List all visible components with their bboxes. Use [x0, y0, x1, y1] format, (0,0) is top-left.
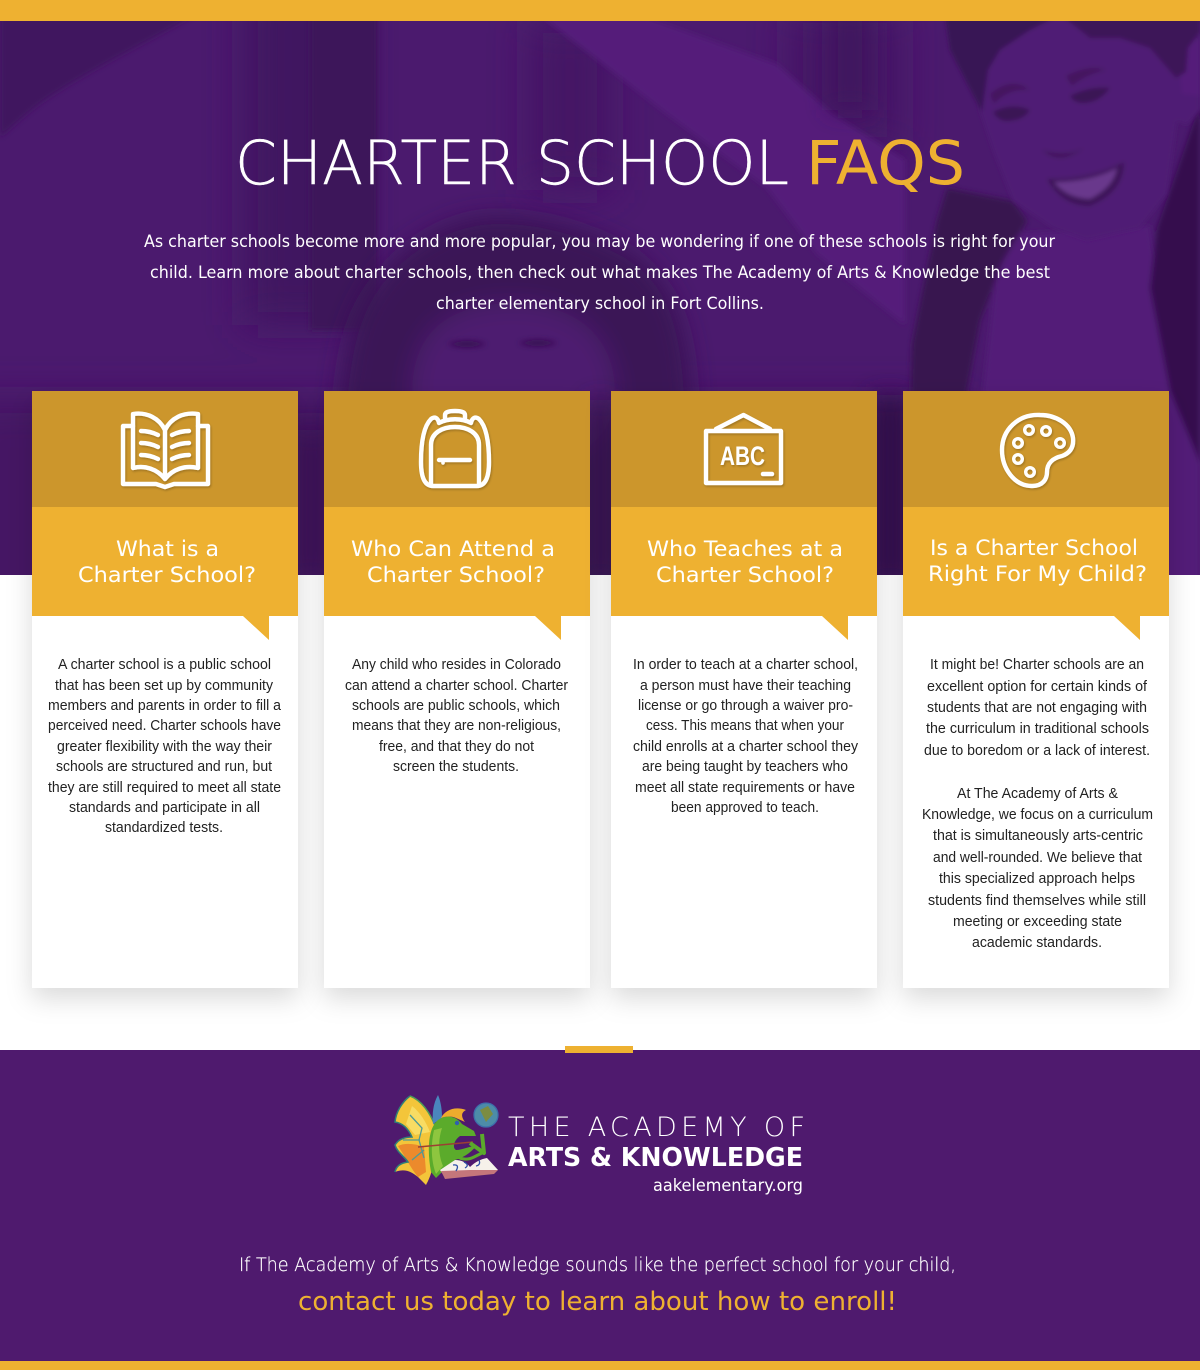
text block: right for my child: Knowledge, we focus on a curriculum: [922, 807, 1153, 823]
text block: who teaches: a person must have their teaching: [640, 678, 851, 694]
heading: what is a charter school: Charter School?: [78, 563, 256, 587]
text block: right for my child: [922, 657, 1153, 951]
closing line: If The Academy of Arts & Knowledge sounds like the perfect school for your child,: [239, 1255, 956, 1276]
text block: who teaches: been approved to teach.: [671, 800, 819, 816]
text block: who teaches: child enrolls at a charter school they: [633, 739, 859, 755]
heading: who teaches: Charter School?: [656, 563, 834, 587]
panel: who teaches: [611, 391, 877, 988]
text block: right for my child: that is simultaneously arts-centric: [933, 828, 1143, 844]
text block: right for my child: and well-rounded. We believe that: [933, 850, 1142, 866]
panel: who can attend: [324, 391, 590, 988]
text block: who teaches: [633, 657, 859, 816]
heading: who teaches: [647, 537, 843, 587]
heading: who can attend: [351, 537, 555, 587]
text block: who can attend: can attend a charter school. Charter: [345, 678, 568, 694]
heading: right for my child: Right For My Child?: [928, 562, 1147, 586]
intro paragraph: [144, 232, 1055, 313]
text block: who can attend: schools are public schools, which: [352, 698, 560, 714]
text block: right for my child: meeting or exceeding state: [953, 914, 1122, 930]
text block: who can attend: means that they are non-religious,: [352, 718, 561, 734]
text block: right for my child: the curriculum in traditional schools: [926, 721, 1149, 737]
icon: open book: [123, 414, 208, 487]
panel: right for my child: [903, 391, 1169, 988]
icon: dragon logo: [395, 1095, 498, 1185]
logo wordmark: [508, 1112, 805, 1195]
intro paragraph: As charter schools become more and more popular, you may be wondering if one of these schools is right for your: [144, 232, 1055, 251]
logo wordmark: ARTS & KNOWLEDGE: [508, 1143, 803, 1173]
text block: who teaches: license or go through a waiver pro-: [638, 698, 853, 714]
text block: what is a charter school: standardized tests.: [105, 820, 223, 836]
footer accent tab: [565, 1046, 633, 1053]
heading: what is a charter school: What is a: [116, 537, 219, 561]
text block: what is a charter school: [48, 657, 281, 836]
text block: right for my child: academic standards.: [972, 935, 1102, 951]
raised arm: [540, 15, 905, 325]
hero photo background: [0, 21, 1200, 575]
icon: paint palette: [1002, 415, 1073, 486]
bottom gold bar: [0, 1361, 1200, 1370]
logo wordmark: aakelementary.org: [653, 1176, 803, 1195]
text block: who can attend: screen the students.: [393, 759, 519, 775]
icon: backpack: [421, 411, 489, 486]
logo wordmark: THE ACADEMY OF: [508, 1112, 805, 1143]
heading: who teaches: Who Teaches at a: [647, 537, 843, 561]
heading: who can attend: Who Can Attend a: [351, 537, 555, 561]
text block: right for my child: students that are not engaging with: [927, 700, 1147, 716]
text block: who can attend: free, and that they do not: [379, 739, 534, 755]
text block: who teaches: cess. This means that when your: [646, 718, 844, 734]
text block: what is a charter school: standards and participate in all: [69, 800, 260, 816]
soft bands: [0, 21, 880, 575]
top gold bar: [0, 0, 1200, 21]
text block: what is a charter school: they are still required to meet all state: [48, 780, 281, 796]
text block: who teaches: In order to teach at a charter school,: [633, 657, 858, 673]
text block: who teaches: are being taught by teachers who: [642, 759, 848, 775]
icon: abc chalkboard: ABC: [720, 441, 765, 471]
text block: who can attend: [345, 657, 568, 775]
text block: right for my child: excellent option for certain kinds of: [927, 679, 1148, 695]
girl in background: [335, 216, 692, 600]
footer panel: [0, 1050, 1200, 1361]
icon: abc chalkboard: [706, 415, 781, 483]
text block: what is a charter school: members and parents in order to fill a: [48, 698, 281, 714]
text block: what is a charter school: perceived need. Charter schools have: [48, 718, 281, 734]
text block: what is a charter school: that has been set up by community: [55, 678, 274, 694]
text block: right for my child: students find themselves while still: [928, 893, 1146, 909]
text block: who teaches: meet all state requirements or have: [635, 780, 855, 796]
text block: right for my child: It might be! Charter schools are an: [930, 657, 1144, 673]
heading: who can attend: Charter School?: [367, 563, 545, 587]
text block: who can attend: Any child who resides in Colorado: [352, 657, 561, 673]
girl eyes: [447, 340, 558, 347]
intro paragraph: child. Learn more about charter schools, then check out what makes The Academy of Arts & Knowledge the best: [150, 263, 1051, 282]
text block: what is a charter school: schools are structured and run, but: [56, 759, 272, 775]
intro paragraph: charter elementary school in Fort Collins.: [436, 294, 764, 313]
call to action: contact us today to learn about how to enroll!: [298, 1287, 897, 1317]
heading: right for my child: [928, 536, 1147, 586]
title: FAQS: [806, 128, 965, 199]
boy: body and straps: [905, 104, 1200, 600]
boy: head: [945, 21, 1200, 206]
text block: right for my child: At The Academy of Arts &: [957, 786, 1118, 802]
panel: what is a charter school: [32, 391, 298, 988]
text block: what is a charter school: greater flexibility with the way their: [57, 739, 272, 755]
text block: what is a charter school: A charter school is a public school: [58, 657, 271, 673]
heading: what is a charter school: [78, 537, 256, 587]
heading: right for my child: Is a Charter School: [930, 536, 1138, 560]
text block: right for my child: this specialized approach helps: [939, 871, 1135, 887]
title: CHARTER SCHOOL: [235, 128, 789, 199]
gap shading between cards: [298, 395, 908, 585]
text block: right for my child: due to boredom or a lack of interest.: [924, 743, 1150, 759]
